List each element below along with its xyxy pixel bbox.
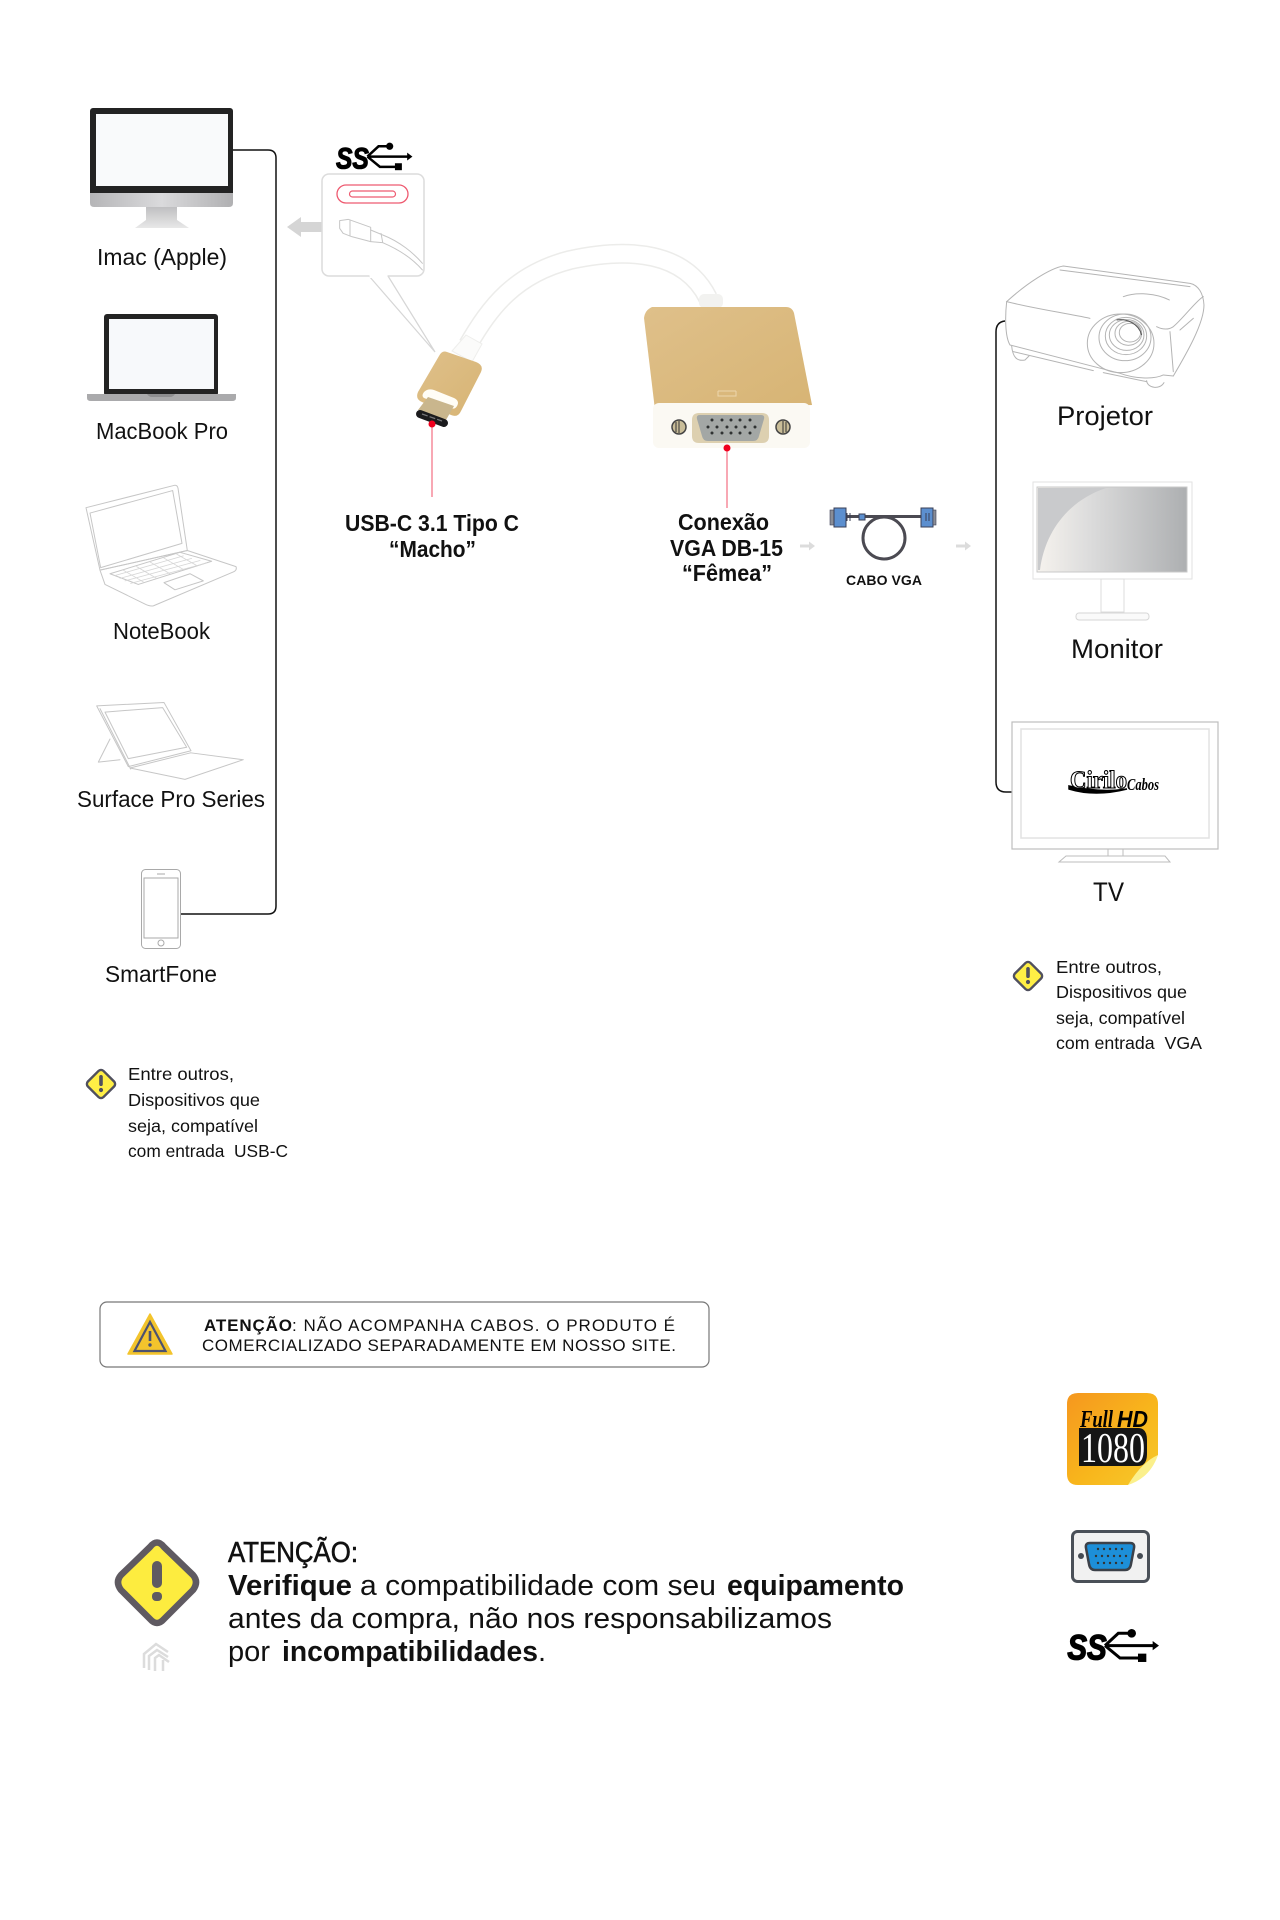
icon: warning diamond left — [85, 1068, 117, 1100]
icon: large warning diamond — [118, 1542, 196, 1623]
connector line: source devices — [181, 150, 276, 914]
label: Imac (Apple): Imac (Apple) — [97, 244, 227, 270]
text: compatibility note USB-C: Entre outros, — [128, 1064, 234, 1084]
marker: VGA red pointer — [724, 444, 730, 508]
label: SmartFone: SmartFone — [105, 961, 217, 987]
label: VGA connection — [670, 509, 783, 586]
badge: Full HD 1080: HD — [1117, 1406, 1148, 1432]
text: notice — [202, 1315, 676, 1355]
text: compatibility warning — [228, 1535, 904, 1668]
icon: warning triangle — [128, 1314, 172, 1354]
device: notebook — [86, 485, 236, 606]
label: TV: TV — [1093, 877, 1124, 907]
label: Surface Pro Series: Surface Pro Series — [77, 786, 265, 812]
text: notice: ATENÇÃO — [204, 1315, 292, 1335]
device: monitor — [1033, 482, 1192, 620]
label: VGA connection: Conexão — [678, 509, 769, 535]
device: Surface Pro — [97, 702, 243, 779]
label: VGA connection: “Fêmea” — [682, 560, 772, 586]
text: compatibility warning: por — [228, 1636, 270, 1668]
icon: VGA port — [1072, 1532, 1148, 1582]
logo: SuperSpeed USB bottom — [1067, 1628, 1159, 1667]
badge: Full HD 1080: 1080 — [1081, 1426, 1145, 1472]
text: compatibility warning: antes da compra, não nos responsabilizamos — [228, 1603, 832, 1635]
text: compatibility warning: . — [538, 1636, 546, 1668]
icon: faint grey logo — [144, 1644, 169, 1671]
text: compatibility warning: Verifique — [228, 1570, 352, 1602]
logo: SuperSpeed USB top: SS — [336, 143, 369, 176]
text: compatibility warning: equipamento — [727, 1570, 904, 1602]
label: USB-C — [345, 510, 519, 562]
arrow: grey left — [287, 217, 322, 237]
device: TV — [1012, 722, 1218, 862]
label: MacBook Pro: MacBook Pro — [96, 418, 228, 444]
callout bubble: USB-C port — [322, 174, 435, 352]
text: compatibility note VGA: com entrada VGA — [1056, 1033, 1202, 1053]
icon: warning diamond right — [1012, 960, 1044, 992]
device: projector — [1006, 266, 1204, 387]
badge: Full HD 1080: Full — [1079, 1407, 1113, 1433]
text: compatibility warning: incompatibilidades — [282, 1636, 538, 1668]
arrow: small left of cable — [800, 542, 815, 550]
notice box: no cables included — [100, 1302, 709, 1367]
marker: USB-C red pointer — [428, 420, 436, 497]
product: USB-C to VGA adapter — [417, 254, 812, 448]
connector line: output devices — [996, 321, 1013, 792]
VGA housing — [644, 307, 812, 448]
logo: SuperSpeed USB bottom: SS — [1067, 1628, 1107, 1667]
logo: Cirilo Cabos — [1069, 767, 1159, 794]
label: USB-C: “Macho” — [389, 536, 476, 562]
label: USB-C: USB-C 3.1 Tipo C — [345, 510, 519, 536]
device: smartphone — [142, 870, 180, 948]
text: compatibility note VGA: Entre outros, — [1056, 957, 1162, 977]
text: notice: : NÃO ACOMPANHA CABOS. O PRODUTO É — [292, 1316, 675, 1335]
icon: VGA cable — [830, 508, 936, 559]
label: VGA connection: VGA DB-15 — [670, 535, 783, 561]
logo: Cirilo Cabos: Cirilo — [1070, 767, 1127, 794]
arrow: small right of cable — [956, 542, 971, 550]
label: Monitor: Monitor — [1071, 634, 1163, 664]
logo: SuperSpeed USB top — [336, 143, 412, 176]
label: CABO VGA: CABO VGA — [846, 572, 922, 588]
device: MacBook Pro — [87, 314, 236, 401]
text: compatibility note VGA — [1056, 957, 1202, 1053]
text: compatibility note USB-C: Dispositivos que — [128, 1090, 260, 1110]
cable — [468, 254, 723, 345]
text: compatibility note VGA: Dispositivos que — [1056, 982, 1187, 1002]
USB-C plug — [417, 335, 482, 423]
label: Projetor: Projetor — [1057, 401, 1153, 431]
text: compatibility warning: ATENÇÃO: — [228, 1535, 358, 1569]
text: notice: COMERCIALIZADO SEPARADAMENTE EM NOSSO SITE. — [202, 1336, 676, 1355]
text: compatibility note USB-C — [128, 1064, 288, 1161]
label: NoteBook: NoteBook — [113, 618, 210, 644]
text: compatibility warning: a compatibilidade com seu — [360, 1570, 716, 1602]
badge: Full HD 1080 — [1067, 1393, 1158, 1485]
logo: Cirilo Cabos: Cabos — [1127, 775, 1159, 794]
text: compatibility note USB-C: seja, compatível — [128, 1116, 258, 1136]
device: iMac — [90, 108, 233, 228]
text: compatibility note USB-C: com entrada USB-C — [128, 1141, 288, 1161]
text: compatibility note VGA: seja, compatível — [1056, 1008, 1185, 1028]
